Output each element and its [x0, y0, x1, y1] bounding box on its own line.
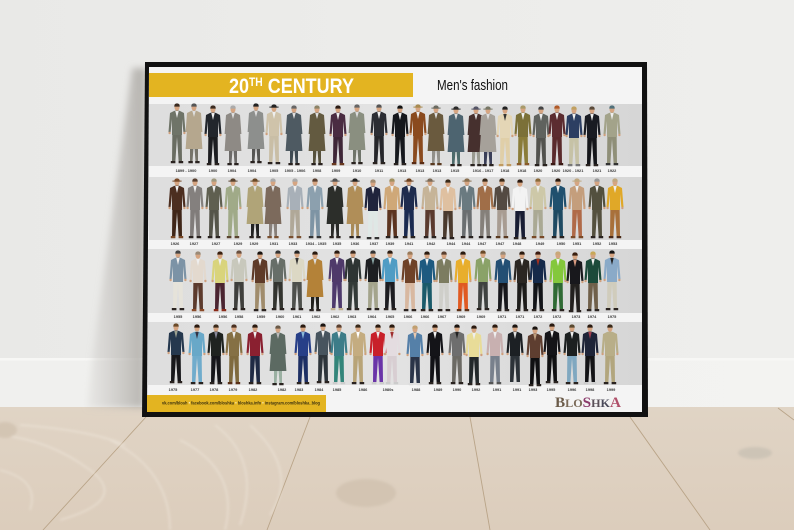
year labels row 2: 1927: [190, 241, 198, 246]
year labels row 4: 1991: [493, 387, 502, 392]
year labels row 2: 1947: [478, 241, 486, 246]
row band 3: [148, 249, 642, 313]
baseboard: [0, 358, 794, 408]
year labels row 4: 1980s: [383, 387, 393, 392]
year labels row 2: [171, 241, 618, 246]
year labels row 2: 1936: [351, 241, 360, 246]
year labels row 2: 1951: [573, 241, 582, 246]
year labels row 1: 1910: [353, 168, 361, 173]
year labels row 1: 1905: [270, 168, 279, 173]
row band 1: [149, 104, 642, 166]
year labels row 4: 1985: [333, 387, 342, 392]
footer links bar: vk.com/blosh • facebook.com/bloshka • bloshka.info • instagram.com/bloshka_blog: [162, 400, 320, 406]
year labels row 4: 1993: [529, 387, 538, 392]
year labels row 3: 1969: [477, 314, 486, 319]
year labels row 4: 1975: [169, 387, 178, 392]
wall background: [0, 0, 794, 360]
year labels row 4: 1978: [210, 387, 219, 392]
year labels row 4: 1988: [412, 387, 421, 392]
year labels row 2: 1929: [250, 241, 259, 246]
year labels row 1: 1913: [433, 168, 442, 173]
year labels row 1: 1904: [248, 168, 257, 173]
year labels row 2: 1947: [496, 241, 504, 246]
year labels row 2: 1934 - 1935: [306, 241, 327, 246]
year labels row 1: 1918: [501, 168, 510, 173]
year labels row 1: 1905 - 1906: [285, 168, 306, 173]
year labels row 2: 1953: [609, 241, 618, 246]
year labels row 4: 1986: [359, 387, 368, 392]
year labels row 3: 1956: [219, 314, 228, 319]
year labels row 4: 1998: [586, 387, 595, 392]
year labels row 3: 1973: [572, 314, 581, 319]
year labels row 2: 1939: [386, 241, 395, 246]
figures row 4: 1975-1999: [167, 323, 619, 386]
title: CENTURY: [263, 75, 354, 98]
poster sheet: [147, 67, 642, 412]
year labels row 3: 1964: [368, 314, 377, 319]
year labels row 4: 1990: [453, 387, 461, 392]
year labels row 4: 1995: [547, 387, 556, 392]
title banner: [149, 73, 413, 98]
year labels row 4: 1982: [278, 387, 287, 392]
year labels row 2: 1927: [212, 241, 220, 246]
year labels row 3: 1969: [457, 314, 466, 319]
year labels row 4: 1977: [191, 387, 199, 392]
year labels row 2: 1944: [462, 241, 471, 246]
year labels row 1: 1920 - 1921: [563, 168, 584, 173]
year labels row 1: 1921: [593, 168, 602, 173]
year labels row 1: 1920: [552, 168, 560, 173]
year labels row 1: 1904: [228, 168, 237, 173]
year labels row 2: 1952: [593, 241, 602, 246]
year labels row 3: 1962: [331, 314, 340, 319]
year labels row 1: 1911: [375, 168, 384, 173]
year labels row 2: 1950: [557, 241, 565, 246]
year labels row 1: 1915: [451, 168, 460, 173]
year labels row 2: 1937: [370, 241, 378, 246]
year labels row 2: 1942: [427, 241, 436, 246]
year labels row 2: 1944: [447, 241, 456, 246]
footer links bar: [147, 395, 326, 412]
floor: [0, 407, 794, 530]
year labels row 3: 1966: [404, 314, 413, 319]
year labels row 3: 1975: [608, 314, 617, 319]
year labels row 2: 1948: [513, 241, 522, 246]
year labels row 3: 1972: [553, 314, 562, 319]
year labels row 2: 1926: [171, 241, 180, 246]
figures row 3: 1955-1975: [169, 250, 621, 312]
year labels row 4: 1979: [229, 387, 238, 392]
year labels row 3: 1963: [348, 314, 357, 319]
year labels row 3: 1956: [193, 314, 202, 319]
figures row 1: 1899-1922: [168, 103, 621, 166]
year labels row 3: 1962: [312, 314, 321, 319]
year labels row 2: 1931: [270, 241, 279, 246]
year labels row 3: 1965: [386, 314, 395, 319]
year labels row 1: 1918: [518, 168, 527, 173]
figures row 2: 1926-1953: [168, 178, 624, 239]
year labels row 1: [176, 168, 617, 173]
year labels row 3: 1955: [174, 314, 183, 319]
year labels row 4: 1989: [434, 387, 443, 392]
year labels row 1: 1913: [416, 168, 425, 173]
year labels row 3: 1961: [293, 314, 302, 319]
year labels row 4: 1984: [315, 387, 324, 392]
subtitle: Men's fashion: [437, 77, 508, 94]
year labels row 3: 1967: [438, 314, 446, 319]
year labels row 1: 1899 - 1900: [176, 168, 196, 173]
poster frame: [142, 62, 648, 417]
year labels row 1: 1916 - 1917: [473, 168, 493, 173]
title: 20: [229, 75, 252, 98]
year labels row 3: 1972: [534, 314, 543, 319]
year labels row 2: 1941: [405, 241, 414, 246]
year labels row 3: 1971: [516, 314, 525, 319]
year labels row 3: 1960: [276, 314, 284, 319]
year labels row 4: 1992: [472, 387, 481, 392]
row band 4: [148, 322, 642, 385]
year labels row 1: 1922: [608, 168, 617, 173]
year labels row 3: 1966: [421, 314, 430, 319]
year labels row 1: 1909: [332, 168, 341, 173]
year labels row 2: 1949: [536, 241, 545, 246]
year labels row 4: 1991: [513, 387, 522, 392]
year labels row 2: 1929: [234, 241, 243, 246]
year labels row 1: 1908: [313, 168, 322, 173]
year labels row 3: 1959: [257, 314, 266, 319]
year labels row 1: 1913: [398, 168, 407, 173]
year labels row 1: 1920: [534, 168, 542, 173]
poster shadow on wall: [87, 68, 146, 408]
year labels row 4: [169, 387, 616, 392]
brand logo: BLOSHKA: [555, 395, 621, 411]
year labels row 3: [174, 314, 617, 319]
title: TH: [249, 75, 263, 89]
year labels row 1: 1900: [209, 168, 217, 173]
year labels row 4: 1982: [249, 387, 258, 392]
row band 2: [149, 177, 642, 240]
year labels row 3: 1974: [588, 314, 597, 319]
year labels row 3: 1958: [235, 314, 244, 319]
year labels row 4: 1996: [568, 387, 577, 392]
year labels row 3: 1971: [498, 314, 507, 319]
year labels row 2: 1935: [333, 241, 342, 246]
year labels row 4: 1999: [607, 387, 616, 392]
year labels row 2: 1933: [289, 241, 298, 246]
year labels row 4: 1983: [295, 387, 304, 392]
